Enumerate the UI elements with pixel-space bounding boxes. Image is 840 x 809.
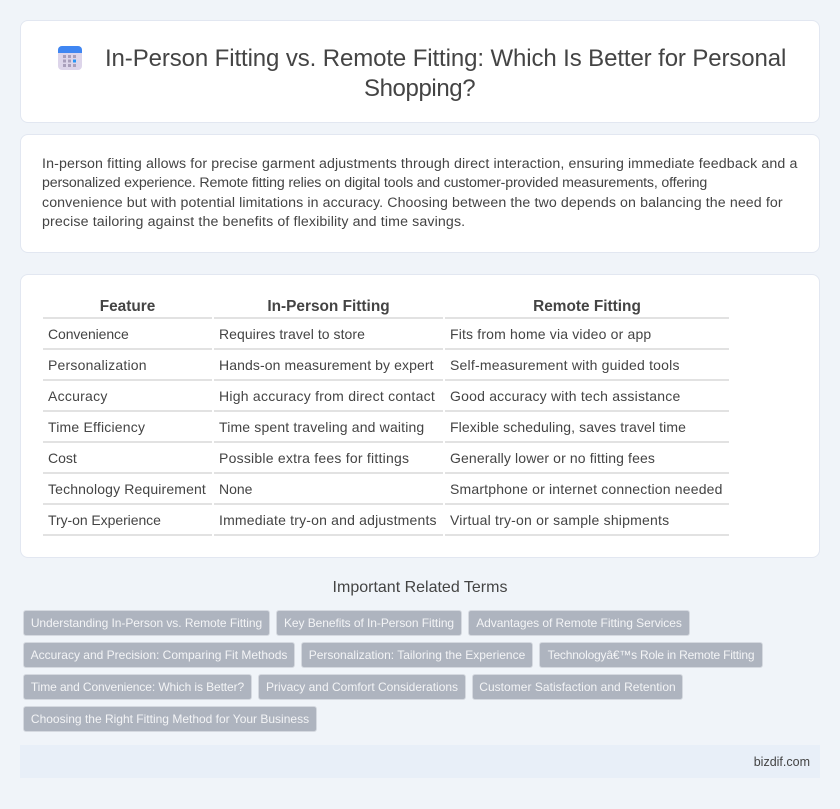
related terms tags: Key Benefits of In-Person Fitting [284, 616, 454, 630]
row: convenience: Requires travel to store [219, 326, 365, 342]
row: technology requirement: Technology Requirement [48, 481, 206, 497]
row: personalization: Self-measurement with guided tools [450, 357, 680, 373]
summary text: personalized experience. Remote fitting relies on digital tools and customer-provided measurements, offering [42, 175, 707, 191]
panel: comparison table [20, 274, 820, 558]
table header: Feature [100, 298, 155, 315]
summary text [42, 156, 798, 230]
summary text: In-person fitting allows for precise garment adjustments through direct interaction, ensuring immediate feedback and a [42, 156, 798, 172]
footer bar [20, 745, 820, 778]
row: personalization: Hands-on measurement by expert [219, 357, 434, 373]
row: convenience: Fits from home via video or app [450, 326, 651, 342]
title [105, 45, 786, 102]
table header [100, 298, 641, 315]
related terms tags: Privacy and Comfort Considerations [266, 680, 458, 694]
row: accuracy: Accuracy [48, 388, 108, 404]
summary text: convenience but with potential limitations in accuracy. Choosing between the two depends on balancing the need for [42, 195, 783, 211]
row: personalization [48, 357, 680, 373]
row: cost [48, 450, 655, 466]
row: technology requirement [48, 481, 723, 497]
row: cost: Cost [48, 450, 77, 466]
row: convenience: Convenience [48, 326, 129, 342]
related terms tags: Understanding In-Person vs. Remote Fitting [31, 616, 262, 630]
related terms tags: Accuracy and Precision: Comparing Fit Methods [31, 648, 287, 662]
panel: header [20, 20, 820, 123]
table header: Remote Fitting [533, 298, 641, 315]
row: accuracy: Good accuracy with tech assistance [450, 388, 680, 404]
row: technology requirement: None [219, 481, 252, 497]
row: time efficiency: Time Efficiency [48, 419, 145, 435]
row: try-on experience: Immediate try-on and adjustments [219, 512, 437, 528]
related terms tags: Advantages of Remote Fitting Services [476, 616, 682, 630]
footer source: bizdif.com [754, 755, 810, 769]
related terms tags: Choosing the Right Fitting Method for Your Business [31, 712, 309, 726]
row: time efficiency: Time spent traveling and waiting [219, 419, 424, 435]
related terms tags: Personalization: Tailoring the Experience [309, 648, 525, 662]
row: try-on experience [48, 512, 669, 528]
row: cost: Possible extra fees for fittings [219, 450, 409, 466]
row: time efficiency [48, 419, 686, 435]
panel: summary paragraph [20, 134, 820, 253]
row: technology requirement: Smartphone or internet connection needed [450, 481, 723, 497]
row: cost: Generally lower or no fitting fees [450, 450, 655, 466]
related terms tags: Customer Satisfaction and Retention [479, 680, 676, 694]
row: convenience [48, 326, 651, 342]
icon: calendar [58, 46, 82, 70]
row: time efficiency: Flexible scheduling, saves travel time [450, 419, 686, 435]
row: accuracy: High accuracy from direct contact [219, 388, 435, 404]
row: personalization: Personalization [48, 357, 147, 373]
title: In-Person Fitting vs. Remote Fitting: Which Is Better for Personal [105, 45, 786, 72]
related terms heading: Important Related Terms [333, 579, 507, 596]
table header: In-Person Fitting [267, 298, 390, 315]
comparison table [43, 298, 729, 536]
related terms tags: Technologyâ€™s Role in Remote Fitting [548, 648, 754, 662]
row: accuracy [48, 388, 680, 404]
title: Shopping? [364, 75, 475, 102]
related terms tags: Time and Convenience: Which is Better? [31, 680, 244, 694]
row: try-on experience: Try-on Experience [48, 512, 161, 528]
row: try-on experience: Virtual try-on or sample shipments [450, 512, 669, 528]
related terms tags [23, 610, 763, 732]
summary text: precise tailoring against the benefits of flexibility and time savings. [42, 214, 465, 230]
